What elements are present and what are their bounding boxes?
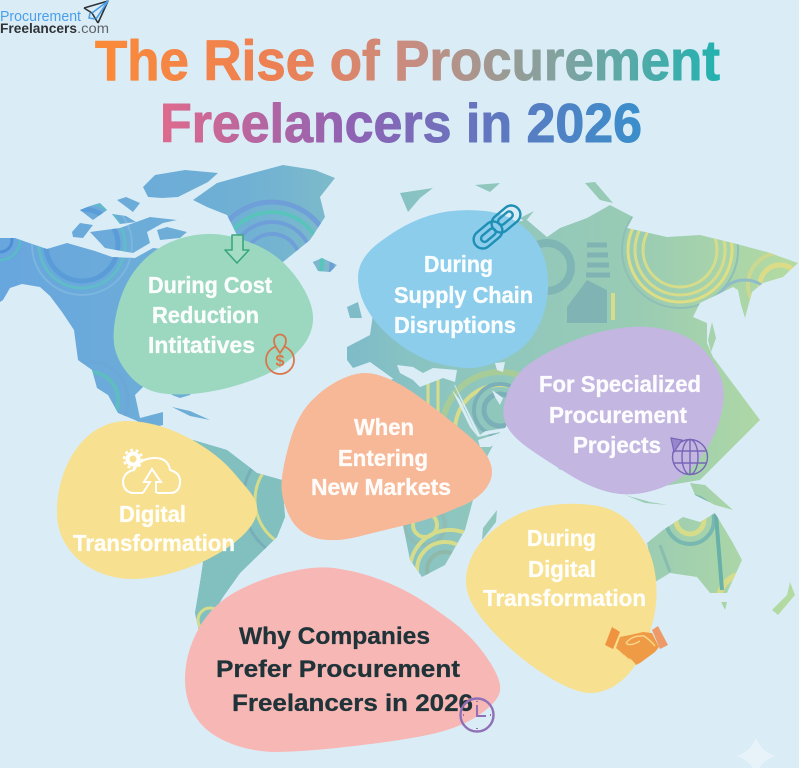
panel: digital transformation left: [57, 421, 257, 579]
label: why companies: [216, 623, 473, 717]
label: new markets: New Markets: [311, 474, 451, 500]
label: supply chain: During: [424, 251, 493, 277]
label: during digital: [483, 525, 646, 611]
panel: during cost reduction initiatives: [114, 234, 313, 394]
label: supply chain: [394, 251, 533, 338]
logo: [0, 1, 109, 36]
icon: chain link: [470, 202, 524, 252]
logo wordmark: Freelancers: [0, 20, 77, 36]
panel: why companies prefer procurement freelancers: [185, 567, 500, 752]
label: digital transformation: Digital: [119, 501, 186, 527]
label: new markets: [311, 414, 451, 500]
icon: down arrow: [225, 235, 249, 263]
label: why companies: Freelancers in 2026: [232, 690, 473, 717]
logo wordmark: [0, 9, 109, 36]
panel: during supply chain disruptions: [358, 202, 548, 368]
icon: dollar pin: [266, 334, 294, 374]
label: why companies: Why Companies: [239, 623, 430, 650]
panel: during digital transformation: [466, 504, 668, 693]
label: during digital: During: [527, 525, 596, 551]
label: digital transformation: Transformation: [73, 530, 235, 556]
icon: paper plane: [84, 1, 108, 23]
label: during digital: Digital: [528, 556, 596, 582]
label: digital transformation: [73, 501, 235, 556]
label: specialized projects: Procurement: [549, 402, 687, 428]
label: cost reduction: [148, 272, 272, 358]
icon: cloud and gear: [123, 450, 180, 493]
label: new markets: Entering: [338, 445, 428, 471]
label: specialized projects: [539, 371, 701, 458]
logo wordmark: .com: [77, 20, 109, 36]
label: cost reduction: Intitatives: [148, 332, 255, 358]
title: Freelancers in 2026: [160, 92, 642, 154]
label: why companies: Prefer Procurement: [216, 656, 460, 683]
world map: [0, 150, 799, 650]
title: [95, 29, 720, 154]
label: supply chain: Supply Chain: [394, 282, 533, 308]
label: cost reduction: During Cost: [148, 272, 272, 298]
label: during digital: Transformation: [483, 585, 646, 611]
icon: dollar pin: $: [276, 353, 285, 370]
label: specialized projects: For Specialized: [539, 371, 701, 397]
label: new markets: When: [354, 414, 414, 440]
label: cost reduction: Reduction: [152, 302, 259, 328]
icon: clock: [460, 698, 494, 732]
label: specialized projects: Projects: [573, 432, 661, 458]
label: supply chain: Disruptions: [394, 312, 516, 338]
panel: when entering new markets: [281, 373, 492, 540]
panel: for specialized procurement projects: [503, 327, 724, 494]
icon: handshake: [605, 626, 668, 665]
icon: globe: [671, 438, 708, 474]
icon: sparkle: [737, 738, 775, 768]
logo wordmark: Procurement: [0, 9, 81, 25]
title: The Rise of Procurement: [95, 29, 720, 93]
